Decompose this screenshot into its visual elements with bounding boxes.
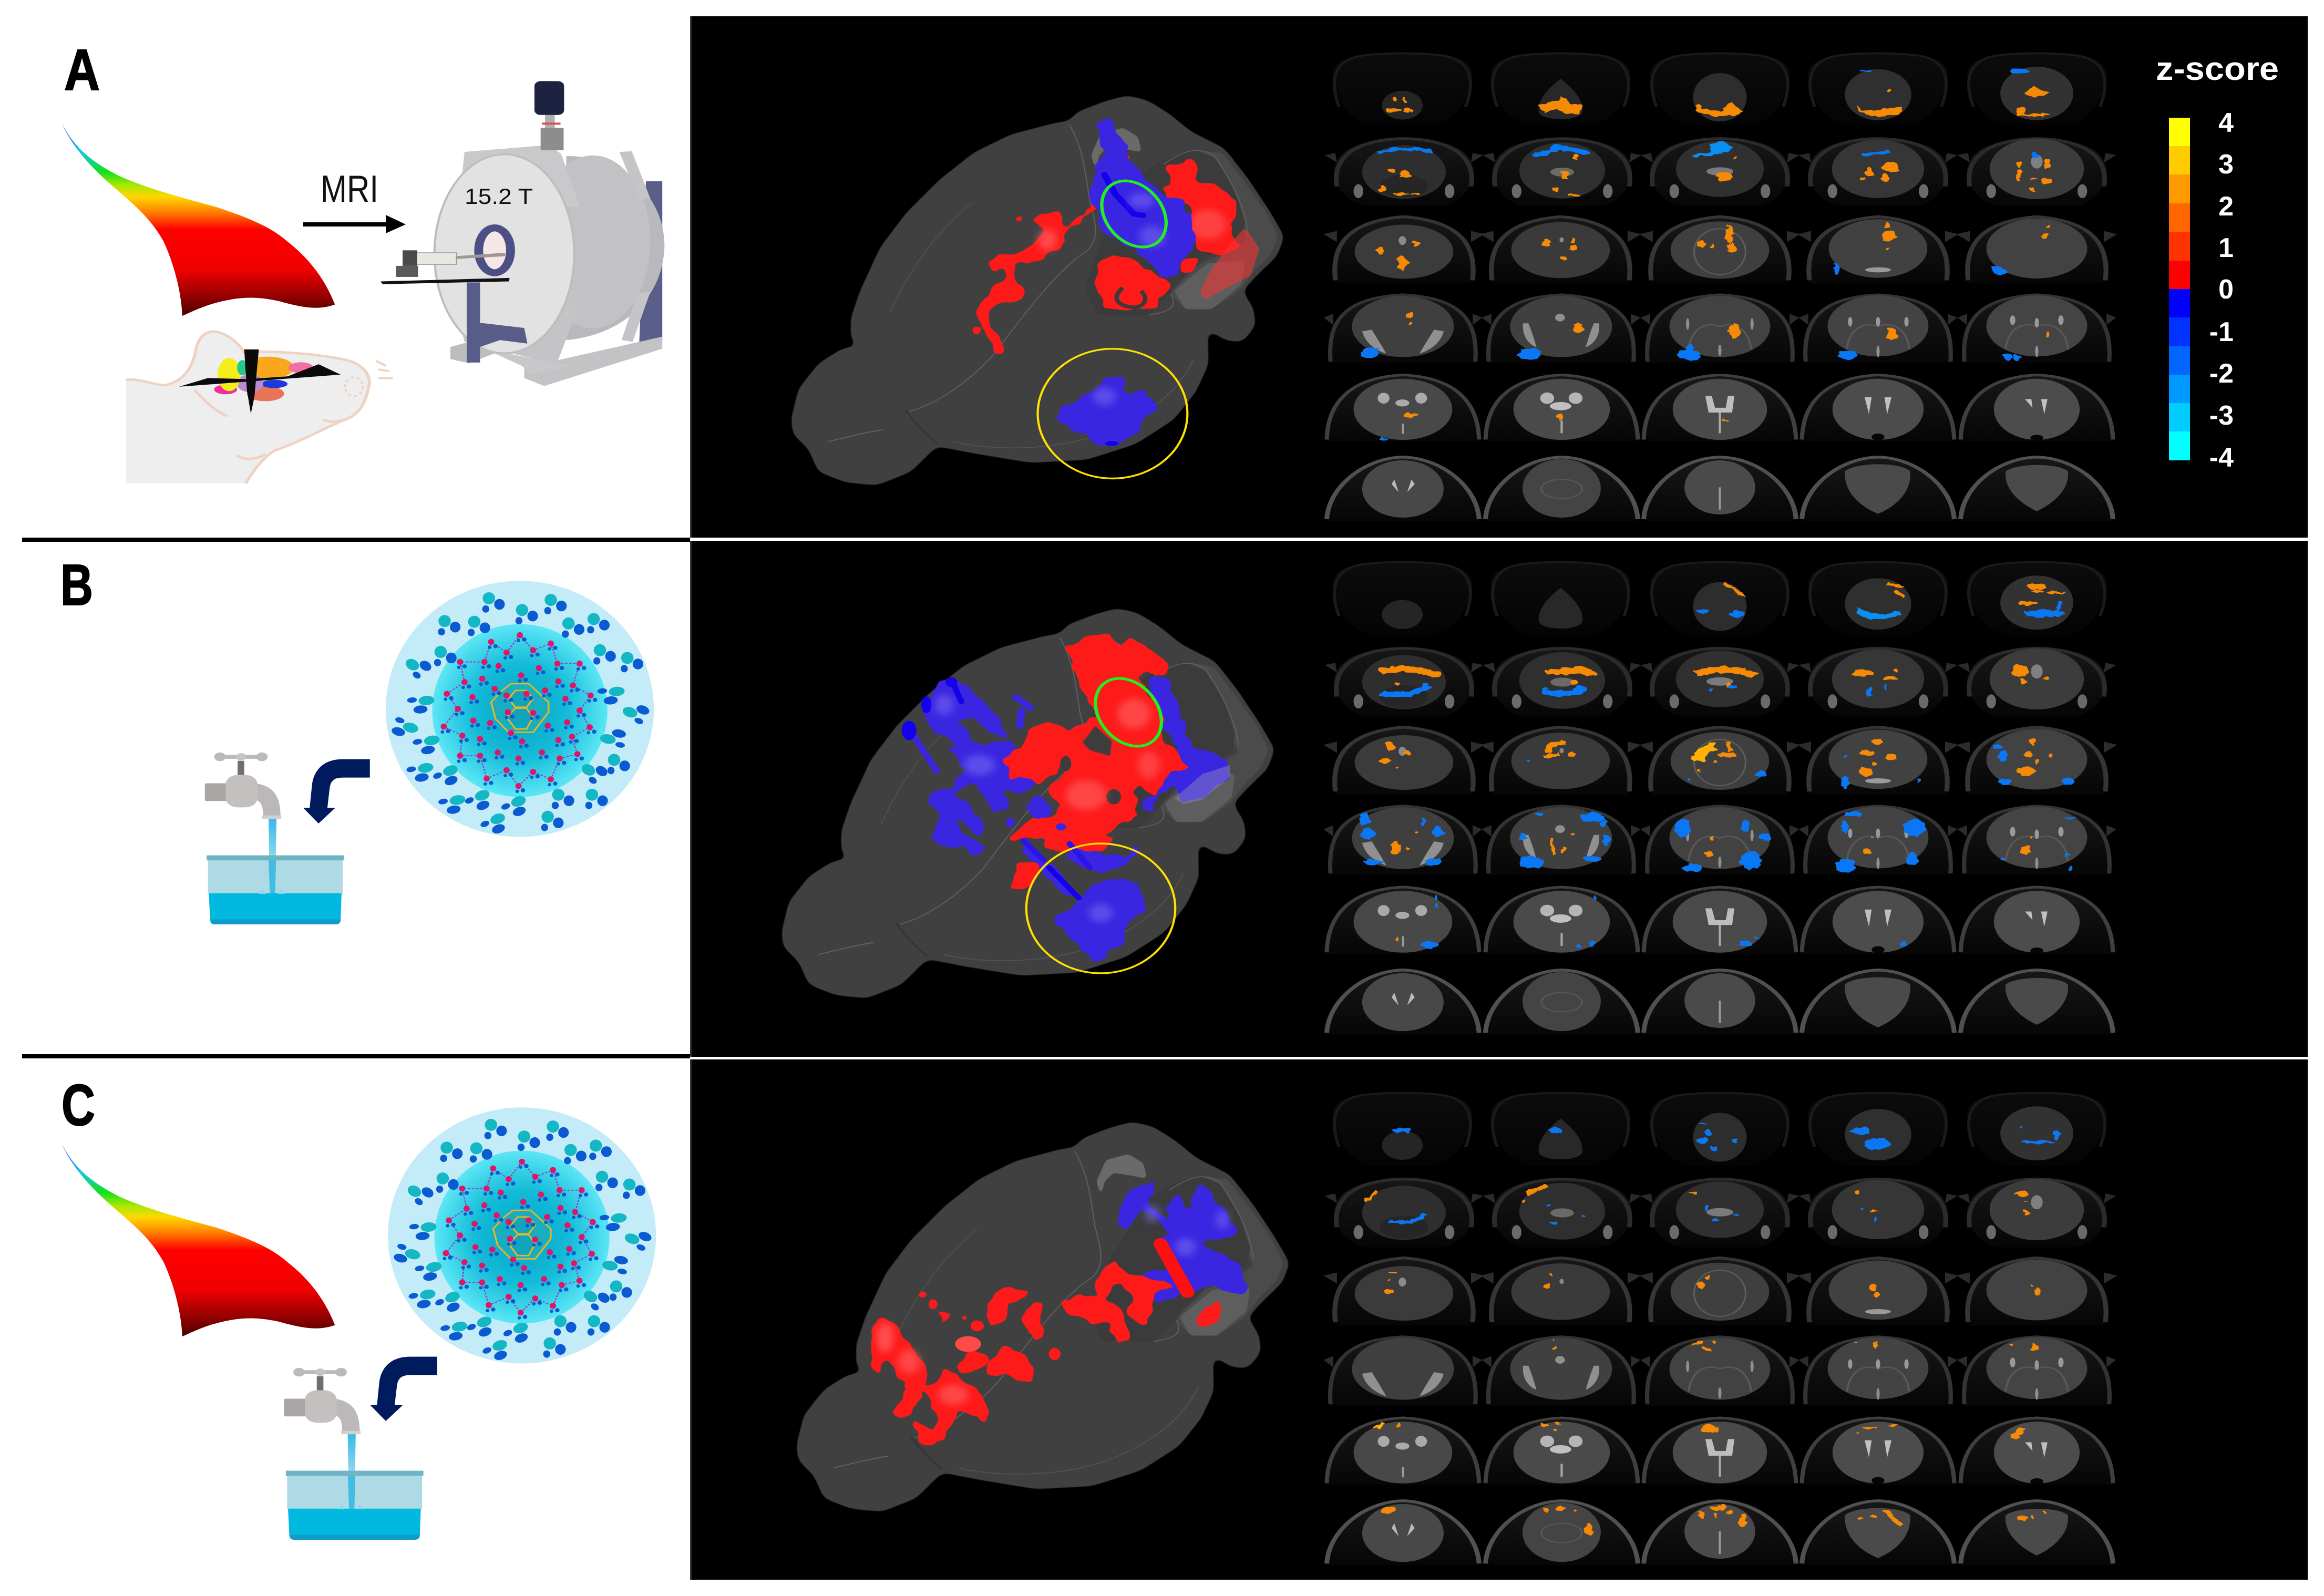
3D brain B	[781, 608, 1275, 998]
arrow from sphere to water C	[371, 1357, 437, 1421]
illustration: hydrated molecule sphere C	[388, 1107, 657, 1364]
arrow from sphere to water B	[303, 759, 370, 823]
panel A	[62, 16, 2308, 538]
panel A black background	[690, 16, 2308, 538]
MRI slice grid C	[1323, 1093, 2117, 1565]
illustration: rat with brain and imaging planes	[126, 332, 393, 483]
MRI slice grid B	[1323, 562, 2117, 1034]
legend tick labels: -3	[2209, 400, 2234, 431]
slice activations B	[1360, 583, 2076, 949]
legend tick labels	[2209, 108, 2234, 473]
legend tick labels: 0	[2218, 274, 2234, 305]
illustration: tap and water basin B	[205, 753, 344, 924]
green ROI ellipse A	[1089, 172, 1179, 255]
panel B black background	[690, 541, 2308, 1057]
illustration: rainbow stress horn	[62, 123, 335, 316]
blue activations A	[1056, 120, 1197, 446]
legend colour bar	[2169, 118, 2190, 460]
legend tick labels: -4	[2209, 442, 2234, 473]
arrow to scanner	[303, 215, 406, 233]
3D brain C	[796, 1122, 1290, 1512]
label C: C	[61, 1073, 95, 1138]
panel B	[60, 541, 2308, 1057]
z-score colour legend	[2156, 51, 2279, 473]
scanner field strength label: 15.2 T	[465, 184, 533, 209]
3D brain A	[791, 96, 1284, 486]
illustration: hydrated molecule sphere B	[386, 581, 655, 837]
illustration: rainbow stress horn C	[62, 1144, 335, 1336]
legend tick labels: -2	[2209, 358, 2234, 389]
illustration: MRI scanner	[381, 81, 664, 386]
illustration: tap and water basin C	[284, 1368, 424, 1540]
MRI slice grid A	[1323, 53, 2117, 521]
label A: A	[64, 38, 100, 102]
separator line B/C	[22, 1054, 690, 1058]
separator line A/B	[22, 538, 690, 542]
legend tick labels: 3	[2218, 149, 2234, 180]
activations and ROI markers B	[902, 632, 1230, 973]
red activations A	[972, 154, 1259, 349]
activations C	[872, 1182, 1247, 1446]
panel C	[61, 1059, 2308, 1580]
panel C black background	[690, 1059, 2308, 1580]
yellow ROI circle A	[1038, 349, 1187, 478]
slice activations C	[1365, 1123, 2059, 1536]
green ROI ellipse B	[1083, 670, 1174, 755]
legend tick labels: 2	[2218, 191, 2234, 222]
legend tick labels: -1	[2209, 317, 2234, 347]
label B: B	[60, 553, 93, 617]
legend title: z-score	[2156, 51, 2279, 87]
slice activations A	[1362, 69, 2052, 440]
yellow ROI circle B	[1026, 843, 1175, 973]
legend tick labels: 1	[2218, 233, 2234, 263]
MRI arrow label: MRI	[321, 168, 378, 210]
legend tick labels: 4	[2218, 108, 2234, 138]
